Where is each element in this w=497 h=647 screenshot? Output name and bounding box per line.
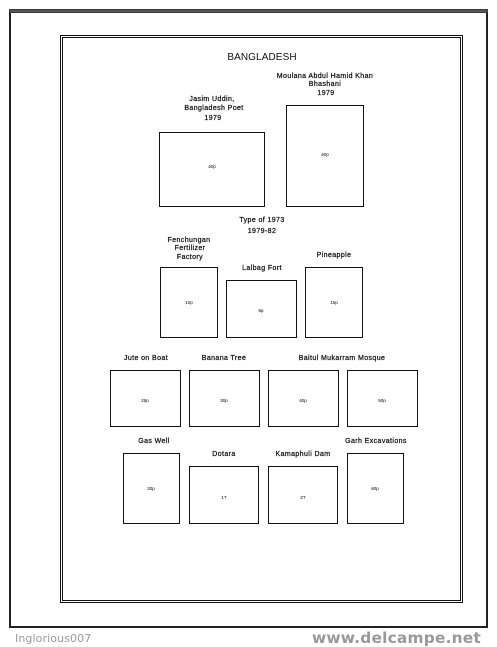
section heading: Type of 1973 [239,217,285,235]
stamp: Jute on Boat: 25p [141,398,149,403]
stamp: Lalbag Fort: 5p [258,308,264,313]
stamp: Gas Well [124,438,180,524]
stamp: Dotara [190,451,258,524]
stamp: Banana Tree: 30p [220,398,228,403]
stamp: Fenchungan Fertilizer Factory: Fertilizer [175,245,206,252]
watermark: seller name: Inglorious007 [15,632,91,645]
stamp: Kamaphuli Dam: 2T [300,495,306,500]
stamp: Dotara: Dotara [212,451,236,458]
watermark: site: www.delcampe.net [312,629,481,647]
stamp: Jasim Uddin: 1979 [204,115,222,122]
stamp: Gas Well: Gas Well [138,438,170,445]
stamp: Fenchungan Fertilizer Factory [160,237,218,338]
stamp: Pineapple: 15p [330,300,338,305]
stamp: Lalbag Fort: Lalbag Fort [242,265,282,272]
section heading: Type of 1973: 1979-82 [248,228,276,235]
stamps: Baitul Mukarram Mosque: 40p [299,398,307,403]
stamp: Kamaphuli Dam: Kamaphuli Dam [276,451,330,458]
stamp: Bhashani: 40p [321,152,329,157]
stamp: Bhashani: Moulana Abdul Hamid Khan [277,73,373,80]
stamp: Garh Excavations: 60p [371,486,379,491]
stamp: Lalbag Fort [226,265,296,338]
stamp: Fenchungan Fertilizer Factory: Factory [177,254,203,261]
stamp: Pineapple: Pineapple [317,252,351,259]
section heading: Type of 1973: Type of 1973 [239,217,285,224]
stamp: Bhashani [277,73,373,206]
stamp: Jasim Uddin: Bangladesh Poet [184,105,244,112]
stamp: Banana Tree [190,355,260,426]
stamps: Baitul Mukarram Mosque [268,355,418,426]
stamp: Bhashani: Bhashani [309,81,341,88]
stamp: Kamaphuli Dam [268,451,338,524]
stamp: Fenchungan Fertilizer Factory: 10p [185,300,193,305]
stamps: Baitul Mukarram Mosque: Baitul Mukarram Mosque [299,355,385,362]
stamp: Bhashani: 1979 [317,90,335,97]
stamp: Jasim Uddin: 40p [208,164,216,169]
stamp: Jasim Uddin: Jasim Uddin, [189,96,235,103]
stamps: Baitul Mukarram Mosque: 50p [378,398,386,403]
stamp: Gas Well: 20p [147,486,155,491]
stamp: Jute on Boat: Jute on Boat [124,355,168,362]
stamp: Fenchungan Fertilizer Factory: Fenchungan [168,237,210,244]
stamp: Garh Excavations [345,438,407,524]
stamp: Dotara: 1T [221,495,227,500]
title: BANGLADESH [227,52,297,63]
inner double border [60,36,462,602]
stamp: Jasim Uddin [160,96,264,206]
stamp: Garh Excavations: Garh Excavations [345,438,407,445]
stamp: Jute on Boat [110,355,180,426]
stamp: Pineapple [306,252,362,338]
stamp: Banana Tree: Banana Tree [202,355,246,362]
